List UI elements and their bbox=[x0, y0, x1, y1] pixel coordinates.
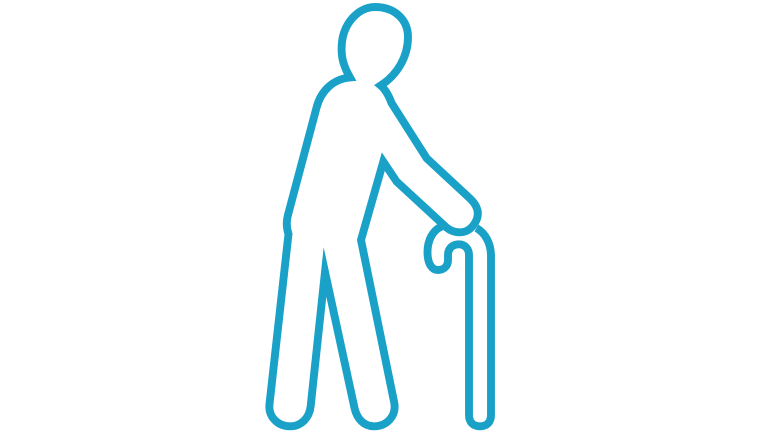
person outline bbox=[269, 7, 478, 426]
cane outline bbox=[428, 226, 491, 426]
